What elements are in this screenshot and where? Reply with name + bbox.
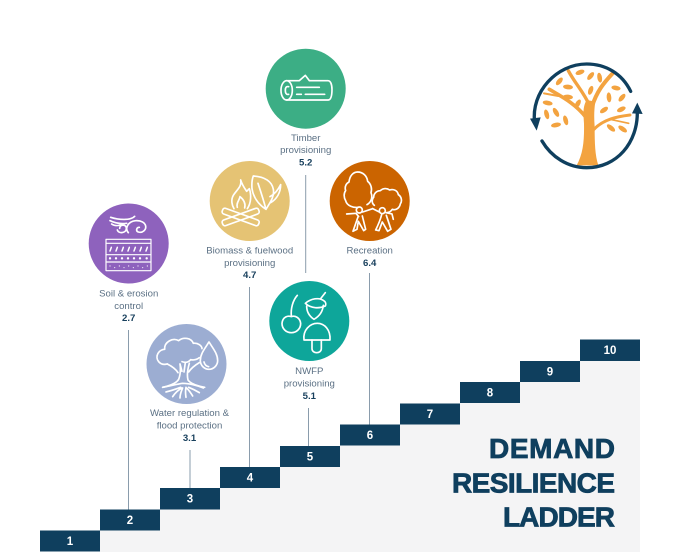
panel: recreation [330,161,410,269]
label: water: flood protection [157,420,222,432]
step 10: 10 [604,345,616,357]
step 9: 9 [547,366,553,378]
leaves [542,69,628,134]
step 3 [160,488,220,510]
panel: timber provisioning [266,49,346,168]
tree [544,71,630,165]
step 4 [220,467,280,488]
label: recreation [346,246,393,269]
step 3: 3 [187,494,193,506]
label: water: 3.1 [183,433,197,444]
step 4: 4 [247,472,254,484]
cycle arrows [534,64,637,168]
label: soil: Soil & erosion [99,288,158,300]
label: water: Water regulation & [150,408,230,419]
panel: NWFP provisioning [269,281,349,402]
label: timber: 5.2 [299,158,312,168]
icon: cherry, acorn and mushroom [282,293,330,353]
label: timber: Timber [291,133,321,144]
step 2: 2 [127,515,133,527]
label: NWFP: 5.1 [303,391,317,402]
panel: water regulation and flood protection [146,324,230,444]
icon: log [281,75,332,100]
title [452,433,615,532]
panel: biomass and fuelwood provisioning [206,161,293,281]
label: NWFP: provisioning [284,378,335,390]
label: water [150,408,230,444]
icon: tree with roots and water drop [157,338,218,398]
label: biomass: provisioning [224,258,275,269]
step 1 [40,530,100,552]
icon: campfire and leaf [221,176,281,226]
ladder steps [40,340,640,552]
label: timber: provisioning [280,145,331,156]
step 10 [580,340,640,361]
label: soil [99,288,158,324]
label: biomass: 4.7 [243,270,256,281]
step 5 [280,446,340,467]
label: NWFP: NWFP [295,366,323,377]
label: timber [280,133,331,168]
panel: soil and erosion control [89,204,169,324]
label: soil: 2.7 [122,313,135,324]
step 7: 7 [427,409,433,421]
step 8: 8 [487,388,494,400]
label: recreation: Recreation [346,246,393,256]
icon: wind over soil layers [106,216,151,271]
label: NWFP [284,366,335,402]
step 6: 6 [367,430,373,442]
label: recreation: 6.4 [363,258,377,269]
step 7 [400,404,460,424]
title: RESILIENCE [452,468,615,498]
icon: trees and people [344,172,401,231]
step 9 [520,361,580,382]
step 6 [340,424,400,446]
step 8 [460,382,520,403]
step 1: 1 [67,536,74,548]
label: biomass: Biomass & fuelwood [206,246,293,256]
title: LADDER [503,502,615,532]
step 5: 5 [307,452,314,464]
label: biomass [206,246,293,281]
icon: tree logo with cycle arrows [530,64,643,168]
title: DEMAND [489,433,615,464]
label: soil: control [114,301,143,312]
step 2 [100,510,160,530]
